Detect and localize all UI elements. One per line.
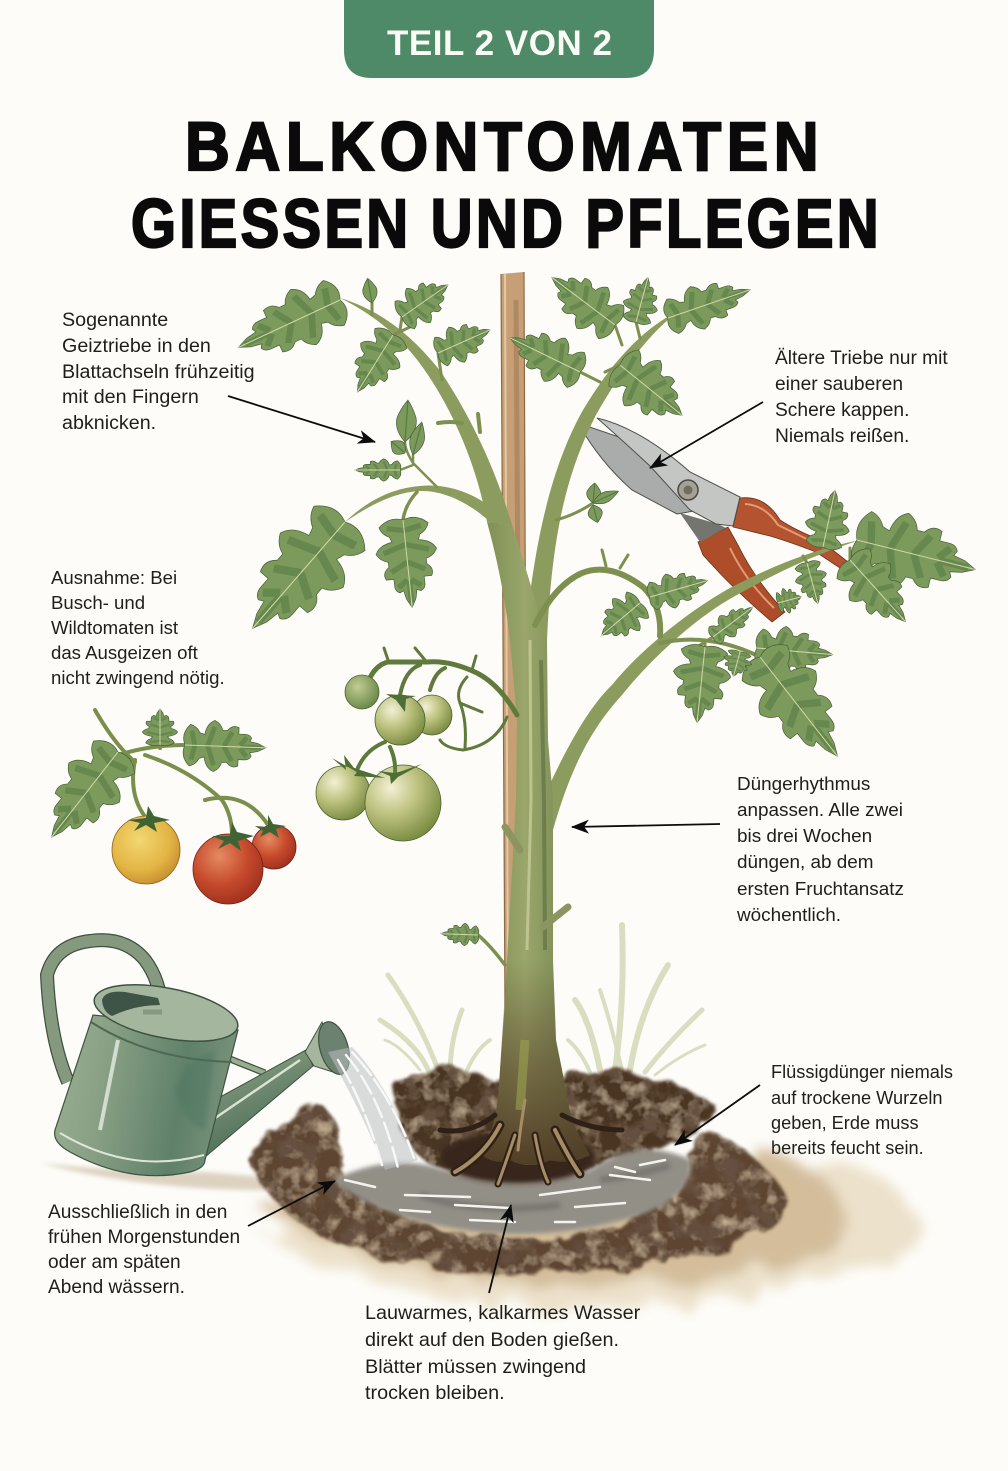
text: side shoots note: abknicken. (62, 412, 156, 434)
text: exception note: nicht zwingend nötig. (51, 667, 225, 688)
text: older shoots note: Schere kappen. (775, 400, 909, 421)
text: side shoots note: Sogenannte (62, 309, 168, 331)
text: side shoots note (62, 309, 255, 434)
arrow: puddle centre (489, 1205, 511, 1293)
text: older shoots note: Niemals reißen. (775, 426, 909, 447)
text: older shoots note: Ältere Triebe nur mit (775, 348, 948, 369)
can handle (47, 940, 162, 1082)
illustration: water stream (328, 1047, 418, 1170)
plant green tomatoes (316, 675, 452, 841)
text: watering time note: Abend wässern. (48, 1277, 185, 1298)
plant fruit truss (368, 648, 517, 750)
can brace (215, 1053, 265, 1073)
text: liquid fertilizer note (771, 1062, 953, 1158)
text: exception note: das Ausgeizen oft (51, 642, 199, 663)
illustration: soil mound (250, 1071, 792, 1274)
text: exception note: Ausnahme: Bei (51, 567, 177, 588)
text: exception note: Wildtomaten ist (51, 617, 179, 638)
illustration: stake (501, 272, 528, 1010)
title: GIESSEN UND PFLEGEN (131, 184, 879, 262)
text: older shoots note (775, 348, 948, 447)
shears handle: upper (733, 498, 848, 568)
text: fertilizer rhythm note: anpassen. Alle zwei (737, 800, 903, 821)
text: side shoots note: mit den Fingern (62, 386, 199, 408)
illustration: dark earth under roots (439, 1132, 595, 1184)
illustration: can shadow on ground (40, 1163, 300, 1190)
banner: part number (344, 0, 654, 78)
shears blades (578, 423, 700, 514)
arrow: puddle left (248, 1181, 335, 1226)
text: watering time note: Ausschließlich in den (48, 1202, 227, 1223)
title (131, 108, 879, 262)
arrow: moist soil (675, 1085, 760, 1145)
banner: part number: TEIL 2 VON 2 (387, 24, 612, 63)
text: exception note: Busch- und (51, 592, 145, 613)
title: BALKONTOMATEN (185, 108, 819, 185)
text: lukewarm water note: trocken bleiben. (365, 1382, 505, 1404)
text: watering time note (48, 1202, 240, 1298)
plant main stem (482, 522, 590, 1165)
can body (55, 1015, 238, 1176)
text: liquid fertilizer note: bereits feucht sein. (771, 1138, 924, 1158)
text: liquid fertilizer note: geben, Erde muss (771, 1113, 919, 1133)
text: fertilizer rhythm note: ersten Fruchtansatz (737, 879, 904, 900)
can rose (305, 1022, 342, 1075)
text: lukewarm water note: Lauwarmes, kalkarmes Wasser (365, 1302, 641, 1324)
illustration: small bush tomato plant (26, 709, 296, 904)
text: exception note (51, 567, 225, 688)
text: liquid fertilizer note: auf trockene Wurzeln (771, 1088, 943, 1108)
bush leaves (26, 731, 145, 857)
text: liquid fertilizer note: Flüssigdünger niemals (771, 1062, 953, 1082)
text: lukewarm water note (365, 1302, 641, 1404)
text: older shoots note: einer sauberen (775, 374, 903, 395)
illustration: soil fringe (255, 1155, 915, 1306)
bush tomatoes (112, 806, 296, 904)
illustration: wet puddle (333, 1150, 690, 1234)
plant leaves (221, 257, 985, 946)
arrow: shears (650, 402, 763, 468)
text: fertilizer rhythm note: Düngerhythmus (737, 774, 870, 795)
illustration: background grass (380, 925, 705, 1075)
text: side shoots note: Geiztriebe in den (62, 335, 211, 357)
text: fertilizer rhythm note: düngen, ab dem (737, 852, 874, 873)
illustration: pruning shears (578, 418, 848, 622)
can top rim (90, 975, 242, 1051)
arrow: side shoots (228, 396, 375, 442)
illustration: tomato plant (221, 257, 985, 1184)
plant side stems (372, 303, 850, 965)
can spout (187, 1050, 313, 1157)
shears handle: lower (698, 527, 785, 622)
plant main branches (340, 298, 860, 830)
text: watering time note: frühen Morgenstunden (48, 1227, 240, 1248)
illustration: watering can (47, 940, 355, 1176)
text: fertilizer rhythm note: bis drei Wochen (737, 826, 872, 847)
bush stems (95, 710, 268, 835)
text: fertilizer rhythm note: wöchentlich. (736, 905, 841, 926)
text: watering time note: oder am späten (48, 1252, 181, 1273)
plant roots (440, 1100, 622, 1184)
shears lower tang (680, 513, 726, 542)
text: fertilizer rhythm note (736, 774, 904, 926)
text: lukewarm water note: Blätter müssen zwingend (365, 1356, 586, 1378)
arrow: stem (572, 824, 720, 827)
text: lukewarm water note: direkt auf den Boden gießen. (365, 1329, 619, 1351)
text: side shoots note: Blattachseln frühzeitig (62, 361, 255, 383)
